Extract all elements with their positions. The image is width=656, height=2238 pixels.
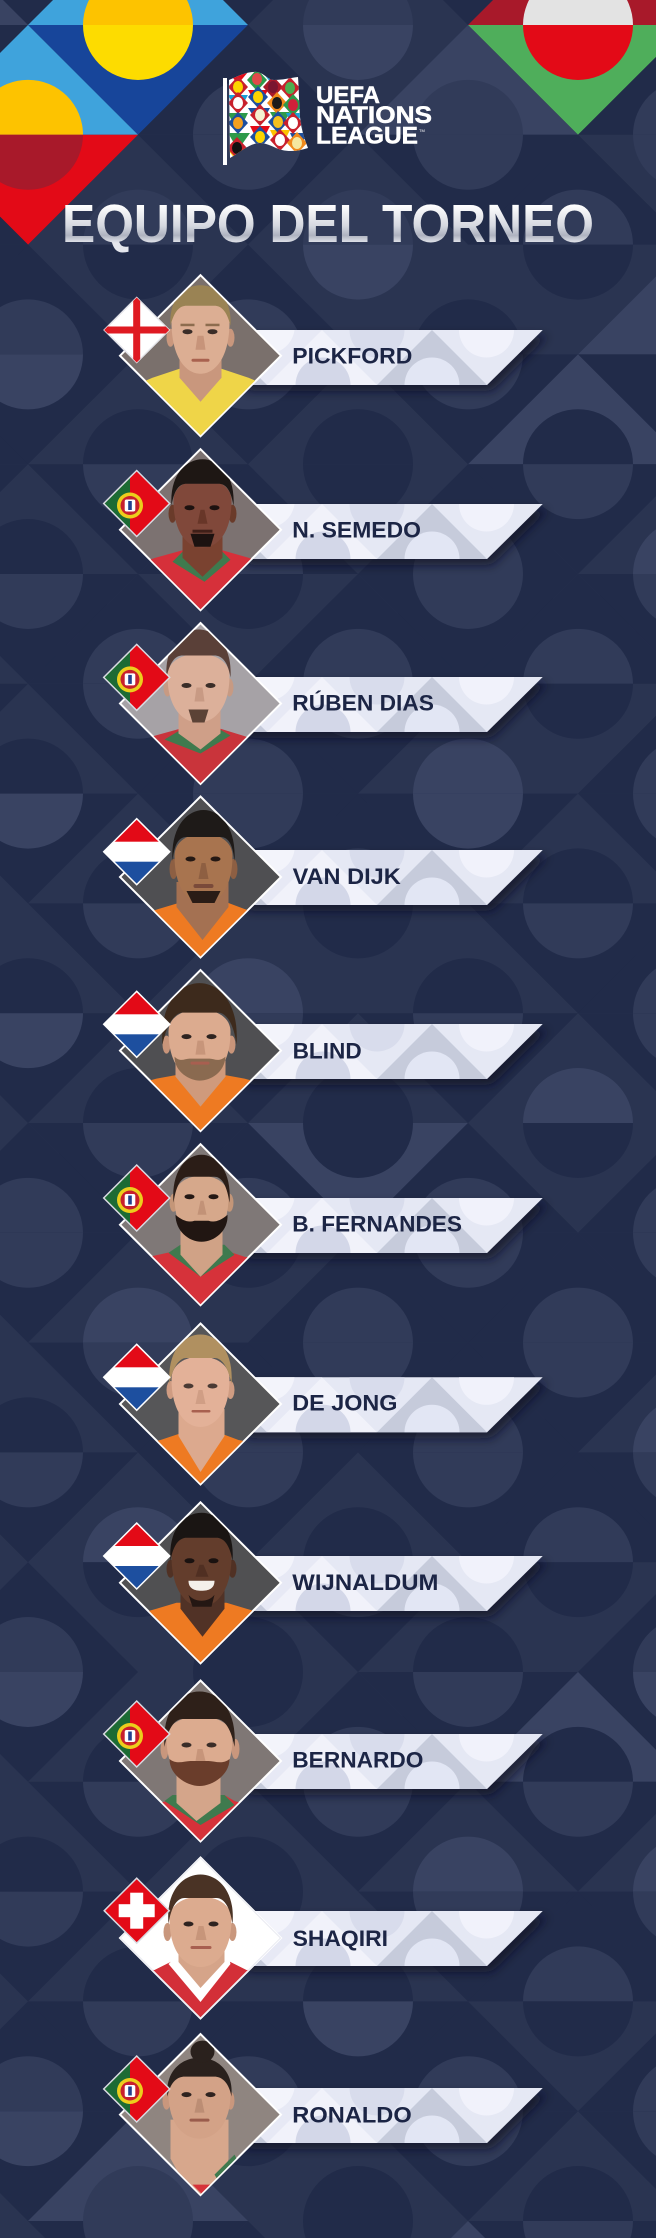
player row: Blind xyxy=(103,970,543,1131)
player row: Wijnaldum xyxy=(103,1502,543,1663)
flag: Netherlands xyxy=(103,1343,171,1411)
player name: B. FERNANDES xyxy=(292,1212,462,1237)
player row: De Jong xyxy=(103,1324,543,1484)
player portrait xyxy=(120,275,281,436)
flag: Portugal xyxy=(103,1164,170,1232)
player row: Pickford xyxy=(104,275,543,436)
player portrait xyxy=(120,796,281,958)
logo wordmark: UEFA xyxy=(316,82,380,109)
player row: Van Dijk xyxy=(103,796,543,958)
player name: BLIND xyxy=(293,1038,362,1063)
player portrait xyxy=(120,970,281,1131)
player row: Shaqiri xyxy=(104,1858,543,2018)
banner xyxy=(212,1911,543,1966)
player name: DE JONG xyxy=(292,1391,398,1416)
player portrait xyxy=(120,1144,281,1305)
flag: Portugal xyxy=(103,2055,170,2123)
banner xyxy=(212,504,543,559)
banner xyxy=(212,1734,543,1789)
player row: Ronaldo xyxy=(103,2034,543,2195)
player portrait xyxy=(120,1502,281,1663)
flag: Netherlands xyxy=(103,1522,171,1590)
player row: N. Semedo xyxy=(103,449,543,610)
player name: RÚBEN DIAS xyxy=(292,690,434,715)
player name: VAN DIJK xyxy=(293,864,401,889)
player portrait xyxy=(120,1680,281,1842)
player portrait xyxy=(120,1324,281,1484)
flag: Netherlands xyxy=(103,818,171,886)
banner xyxy=(212,1024,543,1079)
banner xyxy=(212,1556,543,1611)
player name: BERNARDO xyxy=(292,1748,423,1773)
banner xyxy=(212,2088,543,2143)
player portrait xyxy=(120,1858,281,2018)
banner xyxy=(212,677,543,732)
logo: UEFA Nations League xyxy=(223,68,432,165)
banner xyxy=(212,1198,543,1253)
player name: N. SEMEDO xyxy=(292,517,421,542)
logo wordmark xyxy=(316,82,432,150)
player name: SHAQIRI xyxy=(293,1926,388,1951)
flag: Netherlands xyxy=(103,990,171,1058)
banner xyxy=(212,1377,543,1432)
banner xyxy=(212,850,543,905)
player row: B. Fernandes xyxy=(103,1144,543,1305)
logo wordmark: LEAGUE xyxy=(316,122,418,150)
player portrait xyxy=(120,449,281,610)
flag: Portugal xyxy=(103,643,170,711)
player name: RONALDO xyxy=(292,2103,412,2128)
flag: Portugal xyxy=(103,470,170,538)
logo flag xyxy=(223,68,311,165)
player row: Bernardo xyxy=(103,1680,543,1842)
banner xyxy=(212,330,543,385)
player row: Rúben Dias xyxy=(103,623,543,784)
title: EQUIPO DEL TORNEO xyxy=(62,194,594,254)
flag: Switzerland xyxy=(104,1878,169,1943)
flag: England xyxy=(104,297,170,363)
player portrait xyxy=(120,2034,281,2195)
player name: WIJNALDUM xyxy=(292,1570,438,1595)
logo wordmark: NATIONS xyxy=(316,102,432,129)
flag: Portugal xyxy=(103,1700,170,1768)
player portrait xyxy=(120,623,281,784)
player name: PICKFORD xyxy=(292,343,412,368)
logo wordmark: TM xyxy=(419,128,425,133)
